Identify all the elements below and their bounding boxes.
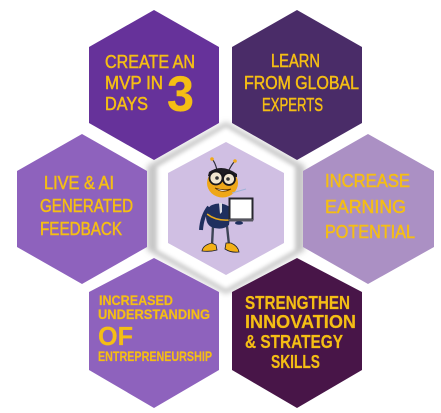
- panel: strengthen innovation and strategy skills: [232, 258, 362, 408]
- panel: strengthen innovation and strategy skills: INNOVATION: [245, 312, 356, 332]
- icon: bee mascot with laptop: [201, 157, 253, 252]
- panel: live and AI generated feedback: FEEDBACK: [40, 219, 122, 239]
- panel: create an MVP in 3 days: DAYS: [105, 94, 148, 114]
- panel: create an MVP in 3 days: CREATE AN: [105, 52, 195, 72]
- panel: increase earning potential: POTENTIAL: [325, 222, 415, 242]
- panel: increased understanding of entrepreneurship: UNDERSTANDING: [98, 306, 210, 322]
- panel: learn from global experts: EXPERTS: [262, 95, 323, 115]
- panel: strengthen innovation and strategy skills: & STRATEGY: [245, 332, 343, 352]
- panel: learn from global experts: LEARN: [271, 51, 320, 71]
- panel: increase earning potential: INCREASE: [325, 171, 410, 191]
- panel: create an MVP in 3 days: 3: [167, 66, 194, 122]
- panel: increase earning potential: EARNING: [325, 197, 406, 217]
- panel: increased understanding of entrepreneurship: INCREASED: [99, 292, 173, 308]
- panel: increased understanding of entrepreneurship: [89, 258, 219, 408]
- panel: centre bee: [168, 142, 284, 275]
- panel: create an MVP in 3 days: MVP IN: [105, 73, 163, 93]
- panel: learn from global experts: FROM GLOBAL: [244, 73, 359, 93]
- panel: live and AI generated feedback: GENERATED: [40, 196, 133, 216]
- panel: increased understanding of entrepreneurship: ENTREPRENEURSHIP: [98, 348, 212, 364]
- panel: learn from global experts: [232, 10, 362, 160]
- panel: increased understanding of entrepreneurship: OF: [98, 321, 133, 351]
- panel: strengthen innovation and strategy skills: STRENGTHEN: [245, 293, 350, 313]
- panel: live and AI generated feedback: [17, 134, 147, 284]
- panel: strengthen innovation and strategy skills: SKILLS: [271, 352, 320, 372]
- panel: create an MVP in 3 days: [89, 10, 219, 160]
- panel: live and AI generated feedback: LIVE & AI: [44, 173, 114, 193]
- panel: increase earning potential: [303, 134, 434, 284]
